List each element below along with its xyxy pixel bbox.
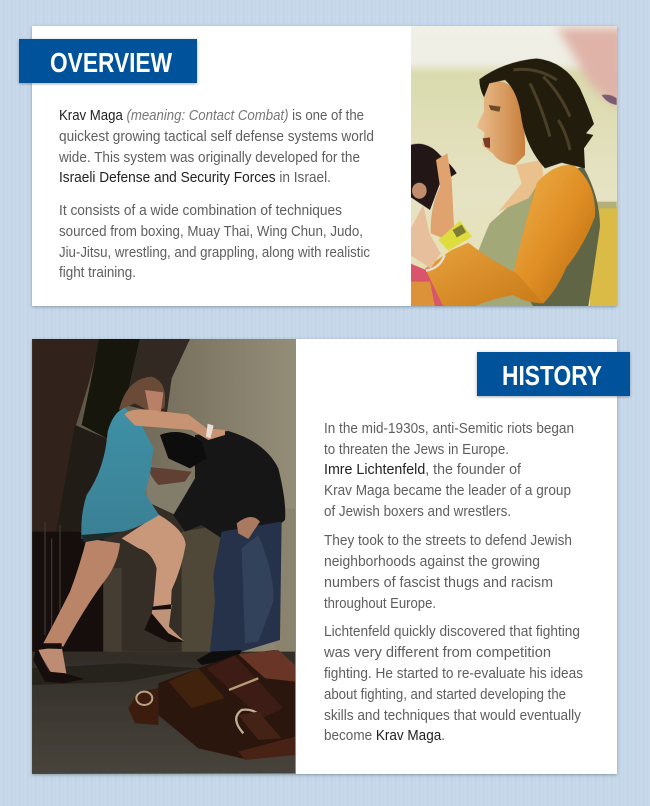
heading: overview: OVERVIEW: [50, 47, 172, 78]
hair: [479, 58, 594, 168]
upper arm: [513, 165, 595, 303]
history text block: numbers of fascist thugs and racism: [324, 575, 553, 591]
heading: overview: [19, 39, 197, 83]
forearm: [425, 243, 543, 307]
heading: history: [477, 352, 630, 396]
history text block: was very different from competition: [323, 645, 551, 661]
history text block: to threaten the Jews in Europe.: [324, 442, 509, 458]
photo: woman kneeing an attacker in an alley: [32, 339, 296, 774]
panel: overview: [19, 26, 623, 308]
heading: history: HISTORY: [502, 360, 602, 391]
woman hair: [119, 377, 165, 411]
history text block: They took to the streets to defend Jewish: [324, 533, 572, 549]
attacker hand: [237, 517, 260, 539]
woman bent leg: [122, 514, 186, 607]
handbag: [158, 650, 295, 759]
history card background: [32, 339, 617, 774]
watch: [438, 221, 472, 251]
attacker hood: [160, 432, 207, 468]
overview text block: [58, 108, 374, 281]
overview text block: It consists of a wide combination of techniques: [59, 203, 342, 219]
panel: history: [32, 339, 630, 774]
woman dress: [81, 408, 159, 539]
history text block: Imre Lichtenfeld, the founder of: [324, 462, 522, 478]
history text block: skills and techniques that would eventually: [324, 708, 582, 724]
overview card background: [32, 26, 617, 306]
woman front arm: [124, 409, 225, 440]
history text block: Krav Maga became the leader of a group: [324, 483, 571, 499]
overview text block: quickest growing tactical self defense systems world: [59, 129, 374, 145]
history text block: throughout Europe.: [324, 596, 436, 612]
woman rear arm: [147, 467, 192, 485]
overview text block: sourced from boxing, Muay Thai, Wing Chun, Judo,: [59, 224, 363, 240]
overview text block: Krav Maga (meaning: Contact Combat) is one of the: [59, 108, 364, 124]
history text block: of Jewish boxers and wrestlers.: [324, 504, 511, 520]
overview text block: wide. This system was originally developed for the: [58, 150, 360, 166]
overview text block: fight training.: [59, 265, 136, 281]
neck: [498, 160, 543, 212]
floor: [32, 652, 295, 773]
history text block: Lichtenfeld quickly discovered that fighting: [324, 624, 580, 640]
history text block: fighting. He started to re-evaluate his ideas: [324, 666, 583, 682]
tank top: [487, 167, 600, 306]
attacker jeans: [210, 522, 282, 652]
face: [477, 81, 525, 165]
history text block: In the mid-1930s, anti-Semitic riots began: [324, 421, 574, 437]
overview text block: Jiu-Jitsu, wrestling, and grappling, along with realistic: [59, 245, 370, 261]
history text block: neighborhoods against the growing: [324, 554, 540, 570]
woman rear leg: [43, 538, 120, 647]
hands: [431, 153, 454, 238]
history text block: about fighting, and started developing the: [324, 687, 566, 703]
backdrop: [32, 339, 100, 535]
history text block: become Krav Maga.: [324, 728, 445, 744]
attacker jacket: [173, 431, 285, 538]
history text block: [323, 421, 583, 744]
overview text block: Israeli Defense and Security Forces in Israel.: [59, 170, 331, 186]
photo: woman raising her hands in a class: [410, 26, 623, 308]
